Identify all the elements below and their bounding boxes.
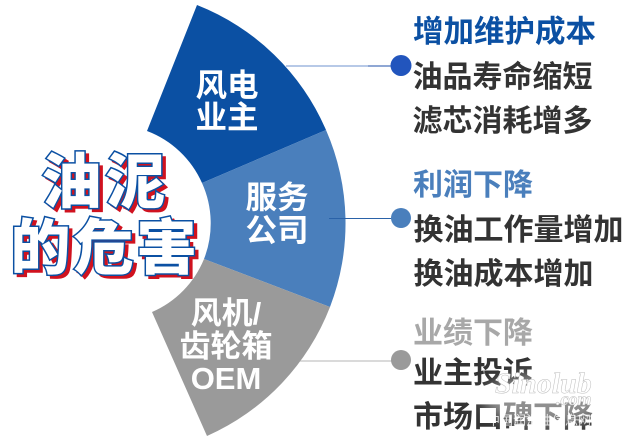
label: OEM: OEM — [191, 361, 261, 396]
panel: service company sector — [202, 130, 346, 307]
title — [10, 149, 203, 285]
label: OEM — [180, 296, 272, 396]
dot: service — [391, 208, 411, 228]
title: 的危害 — [10, 215, 200, 282]
text block: lower profit: 换油工作量增加 — [414, 214, 624, 247]
text block: lower performance: 业主投诉 — [413, 357, 533, 390]
label: OEM: 风机/ — [191, 296, 262, 331]
connector: OEM — [300, 350, 411, 370]
watermark: .com — [556, 389, 592, 409]
text block: increased maintenance costs: 滤芯消耗增多 — [412, 105, 592, 138]
title: 的危害 — [14, 218, 203, 285]
label: wind farm owner: 业主 — [195, 99, 259, 135]
label: service company: 服务 — [245, 179, 309, 215]
text block: increased maintenance costs: 增加维护成本 — [413, 15, 596, 49]
label: service company — [245, 179, 309, 248]
text block: lower profit — [413, 169, 624, 291]
text block: lower performance: 市场口碑下降 — [413, 401, 593, 434]
connector: service — [329, 208, 411, 228]
watermark — [483, 367, 607, 428]
text block: lower profit: 换油成本增加 — [414, 258, 594, 291]
text block: lower performance: 业绩下降 — [413, 317, 533, 350]
text block: lower profit: 利润下降 — [413, 169, 533, 202]
watermark: Sinolub — [495, 367, 592, 400]
connector: owner — [286, 55, 412, 76]
text block: increased maintenance costs — [412, 15, 596, 138]
label: OEM: 齿轮箱 — [180, 329, 272, 364]
dot: OEM — [391, 350, 411, 370]
title: 油泥 — [45, 152, 173, 219]
text block: increased maintenance costs: 油品寿命缩短 — [412, 60, 592, 94]
dot: owner — [390, 55, 412, 76]
panel: OEM sector — [152, 259, 330, 436]
label: wind farm owner: 风电 — [195, 67, 259, 103]
watermark: 中国润滑油信息网 — [487, 413, 591, 428]
title: 油泥 — [42, 149, 170, 216]
label: wind farm owner — [195, 67, 259, 135]
panel: wind farm owner sector — [147, 5, 326, 183]
label: service company: 公司 — [245, 212, 309, 248]
text block: lower performance — [413, 317, 593, 434]
